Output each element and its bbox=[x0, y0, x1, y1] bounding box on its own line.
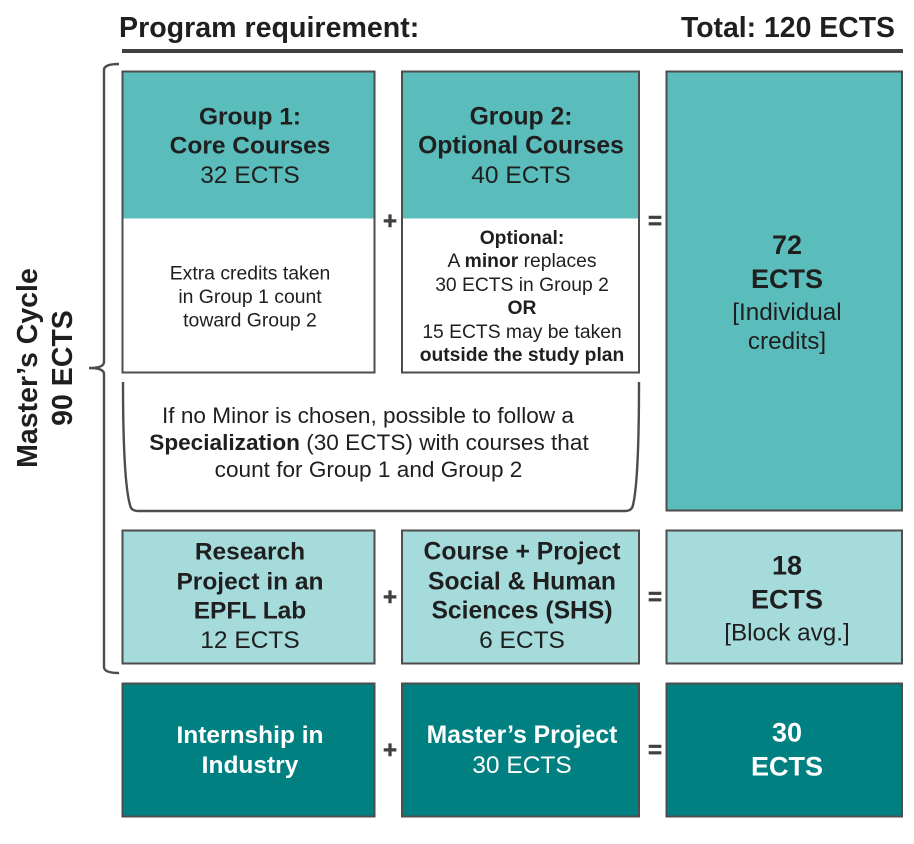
bracket: master's cycle span bbox=[89, 64, 119, 673]
panel: 72 ECTS total bbox=[666, 72, 902, 510]
panel: specialization callout: Specialization (30 ECTS) with courses that bbox=[149, 430, 589, 455]
panel: group 1 core courses bbox=[122, 72, 374, 372]
panel: master's project bbox=[402, 684, 639, 816]
side label: master's cycle bbox=[12, 268, 79, 468]
panel: specialization callout bbox=[123, 382, 639, 511]
panel: group 1 core courses: Extra credits taken bbox=[170, 262, 330, 284]
panel: group 1 core courses: Group 1: bbox=[199, 104, 301, 130]
panel: group 2 optional courses: A minor replaces bbox=[448, 251, 596, 272]
panel: research project bbox=[122, 530, 374, 664]
panel: group 2 optional courses: Optional Courses bbox=[418, 132, 624, 160]
panel: specialization callout: If no Minor is chosen, possible to follow a bbox=[162, 403, 574, 428]
panel: group 1 core courses: Core Courses bbox=[170, 132, 330, 160]
operator: equals row 3: = bbox=[648, 737, 662, 764]
panel: 30 ECTS total: ECTS bbox=[751, 752, 823, 782]
panel: course + project SHS: Course + Project bbox=[424, 538, 620, 566]
panel: course + project SHS: 6 ECTS bbox=[479, 627, 565, 654]
panel: group 2 optional courses bbox=[402, 72, 639, 372]
panel: research project: EPFL Lab bbox=[194, 598, 306, 624]
heading: program requirement: Total: 120 ECTS bbox=[681, 12, 895, 44]
side label: master's cycle: 90 ECTS bbox=[47, 310, 79, 426]
panel: 30 ECTS total bbox=[666, 684, 902, 816]
panel: course + project SHS bbox=[402, 530, 639, 664]
panel: 72 ECTS total: ECTS bbox=[751, 264, 823, 294]
panel: 18 ECTS total: [Block avg.] bbox=[724, 620, 850, 646]
panel: 72 ECTS total: [Individual bbox=[732, 299, 842, 326]
panel: group 2 optional courses: OR bbox=[508, 298, 537, 319]
operator: plus row 1: + bbox=[383, 208, 397, 235]
panel: master's project: 30 ECTS bbox=[472, 752, 572, 779]
panel: 18 ECTS total: 18 bbox=[772, 550, 802, 580]
side label: master's cycle: Master’s Cycle bbox=[12, 268, 44, 468]
panel: group 2 optional courses: Group 2: bbox=[470, 104, 572, 130]
panel: group 2 optional courses: 40 ECTS bbox=[471, 162, 571, 189]
panel: research project: Research bbox=[195, 538, 305, 566]
operator: equals row 1: = bbox=[648, 208, 662, 235]
panel: research project: 12 ECTS bbox=[200, 627, 300, 654]
panel: 18 ECTS total: ECTS bbox=[751, 584, 823, 614]
panel: internship in industry: Internship in bbox=[176, 722, 324, 749]
panel: group 2 optional courses: outside the study plan bbox=[420, 345, 624, 366]
operator: plus row 3: + bbox=[383, 737, 397, 764]
panel: master's project: Master’s Project bbox=[427, 722, 617, 749]
panel: specialization callout: count for Group 1 and Group 2 bbox=[215, 457, 522, 482]
panel: group 1 core courses: 32 ECTS bbox=[200, 162, 300, 189]
panel: group 1 core courses: toward Group 2 bbox=[183, 310, 317, 332]
heading: program requirement bbox=[119, 12, 903, 53]
panel: 72 ECTS total: credits] bbox=[748, 328, 826, 355]
panel: internship in industry bbox=[122, 684, 374, 816]
operator: equals row 2: = bbox=[648, 584, 662, 611]
panel: 18 ECTS total bbox=[666, 530, 902, 664]
heading: program requirement: Program requirement: bbox=[119, 12, 419, 44]
panel: group 2 optional courses: 30 ECTS in Group 2 bbox=[435, 275, 609, 296]
panel: group 2 optional courses: 15 ECTS may be taken bbox=[422, 322, 622, 343]
operator: plus row 2: + bbox=[383, 584, 397, 611]
panel: group 2 optional courses: Optional: bbox=[480, 228, 564, 249]
panel: course + project SHS: Sciences (SHS) bbox=[431, 598, 613, 624]
panel: research project: Project in an bbox=[176, 568, 324, 596]
panel: 30 ECTS total: 30 bbox=[772, 718, 802, 748]
panel: group 1 core courses: in Group 1 count bbox=[178, 286, 322, 308]
panel: 72 ECTS total: 72 bbox=[772, 230, 802, 260]
panel: internship in industry: Industry bbox=[202, 752, 299, 779]
panel: course + project SHS: Social & Human bbox=[428, 568, 616, 596]
